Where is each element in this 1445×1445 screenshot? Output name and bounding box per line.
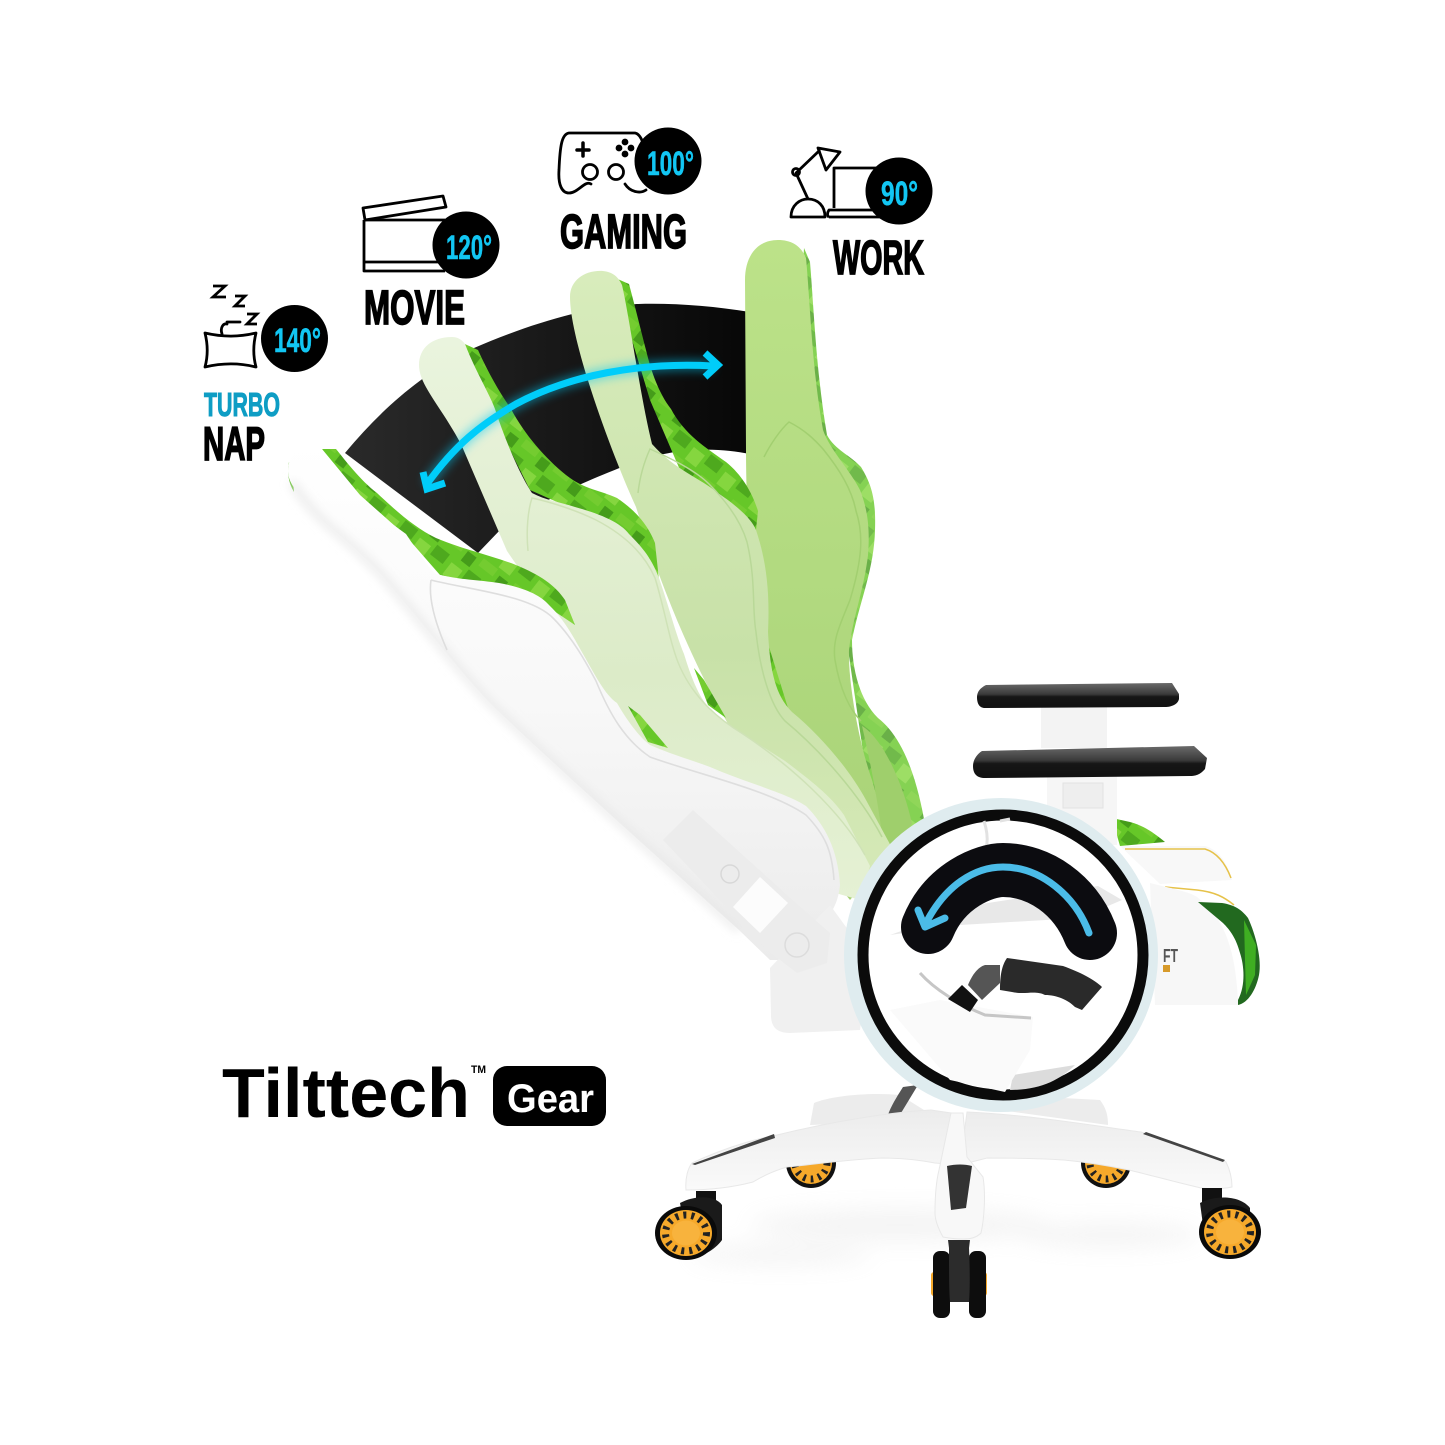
label MOVIE: MOVIE xyxy=(364,282,465,335)
panel 120 xyxy=(419,337,870,900)
gold piping xyxy=(1125,849,1234,905)
caster body left xyxy=(680,1197,722,1258)
caster body right xyxy=(1200,1198,1250,1240)
recline bracket xyxy=(663,810,870,1033)
strip front xyxy=(947,1164,972,1210)
front cushion xyxy=(1150,883,1238,1005)
recline range black arc band xyxy=(345,304,750,553)
icon: pillow xyxy=(205,322,256,367)
icon: gamepad xyxy=(559,133,648,193)
stem left xyxy=(696,1191,716,1205)
trademark: TM xyxy=(471,1064,486,1076)
blue rotation arrow xyxy=(918,867,1089,933)
backrest at 90 degrees xyxy=(745,240,924,900)
floor shadow xyxy=(690,1209,1200,1265)
black curved band xyxy=(928,870,1090,933)
lever elbow xyxy=(968,965,1000,1000)
front right wheel xyxy=(1199,1188,1261,1259)
arm post lower xyxy=(1047,775,1117,845)
title Tilttech: Tilttech xyxy=(222,1054,470,1132)
seam 90 xyxy=(764,422,861,721)
100 degree badge: 100° xyxy=(647,145,694,183)
panel 140 xyxy=(288,443,840,960)
backrest at 100 degrees xyxy=(570,271,892,905)
double headed blue arrow xyxy=(423,353,718,489)
left edge green sliver xyxy=(288,462,294,492)
back right wheel xyxy=(1081,1138,1131,1188)
seam 120 xyxy=(527,498,865,855)
centre caster xyxy=(931,1240,987,1318)
seat top camo xyxy=(1112,818,1165,846)
hub xyxy=(948,1240,970,1302)
rim shade 140 xyxy=(292,482,739,930)
120 degree badge xyxy=(432,212,500,278)
120 degree badge: 120° xyxy=(446,229,492,267)
star base legs xyxy=(686,1110,1232,1239)
icon: laptop xyxy=(828,168,880,217)
camo edge 140 xyxy=(322,449,575,625)
hex logo xyxy=(785,933,809,957)
140 degree badge xyxy=(261,305,328,372)
lower wing 90 xyxy=(862,726,912,860)
panel 100 xyxy=(570,271,892,905)
lever detail lens xyxy=(844,798,1158,1112)
stem right xyxy=(1202,1188,1222,1202)
seat upper cushion xyxy=(1120,846,1232,884)
front leg xyxy=(935,1113,984,1239)
label TURBO: TURBO xyxy=(204,386,280,423)
gas spring xyxy=(886,1085,918,1124)
right tyre xyxy=(969,1251,986,1318)
lower camo 100 xyxy=(766,640,788,708)
Gear badge: Gear xyxy=(507,1077,594,1121)
lower camo 140 xyxy=(628,706,668,748)
camo highlights xyxy=(1244,920,1256,995)
lens outer halo xyxy=(844,798,1158,1112)
camo edge 100 xyxy=(613,277,758,530)
back left wheel xyxy=(786,1138,836,1188)
label GAMING: GAMING xyxy=(560,206,687,259)
90 degree badge: 90° xyxy=(881,175,918,213)
left leg xyxy=(686,1110,960,1190)
strip left xyxy=(692,1134,775,1165)
camo edge 120 xyxy=(456,340,659,580)
arm slider xyxy=(1063,783,1103,808)
tyre right xyxy=(1199,1205,1261,1259)
arm pad upper xyxy=(977,683,1179,708)
camo edge 90 xyxy=(800,248,924,860)
left tyre xyxy=(933,1251,950,1318)
seat side xyxy=(1112,818,1260,1005)
label WORK: WORK xyxy=(833,232,924,285)
lever xyxy=(948,958,1102,1012)
strip right xyxy=(1143,1132,1225,1162)
lens black ring and white inner xyxy=(863,815,1143,1095)
front left wheel xyxy=(655,1191,722,1260)
90 degree badge xyxy=(866,158,932,224)
orange hints xyxy=(931,1272,987,1296)
pin xyxy=(721,865,739,883)
star base back legs xyxy=(810,1094,1108,1125)
brand badge xyxy=(1163,965,1170,972)
backrest at 120 degrees xyxy=(419,337,870,900)
lower camo 120 xyxy=(694,668,726,718)
icon: sleep Z letters xyxy=(213,286,257,324)
back wheels xyxy=(786,1138,1131,1188)
arm post upper xyxy=(1041,704,1107,748)
label NAP: NAP xyxy=(203,417,265,470)
Gear badge xyxy=(493,1066,606,1126)
tyre left xyxy=(655,1206,717,1260)
backrest at 140 degrees (white) xyxy=(288,443,870,1033)
icon: clapperboard xyxy=(363,196,446,271)
armrest lower xyxy=(973,746,1207,845)
140 degree badge: 140° xyxy=(274,322,321,360)
arm pad lower xyxy=(973,746,1207,778)
panel 90 xyxy=(745,240,892,900)
brand letters: FT xyxy=(1163,946,1178,966)
right leg xyxy=(960,1112,1232,1189)
100 degree badge xyxy=(634,128,702,194)
lever handle xyxy=(1000,958,1102,1010)
interior shading xyxy=(890,819,1122,1092)
lever clip xyxy=(948,985,978,1012)
icon: desk lamp xyxy=(791,148,840,217)
stitching seam xyxy=(430,580,834,880)
seam 100 xyxy=(638,449,882,837)
armrest upper xyxy=(977,683,1179,748)
front camo xyxy=(1198,902,1260,1005)
